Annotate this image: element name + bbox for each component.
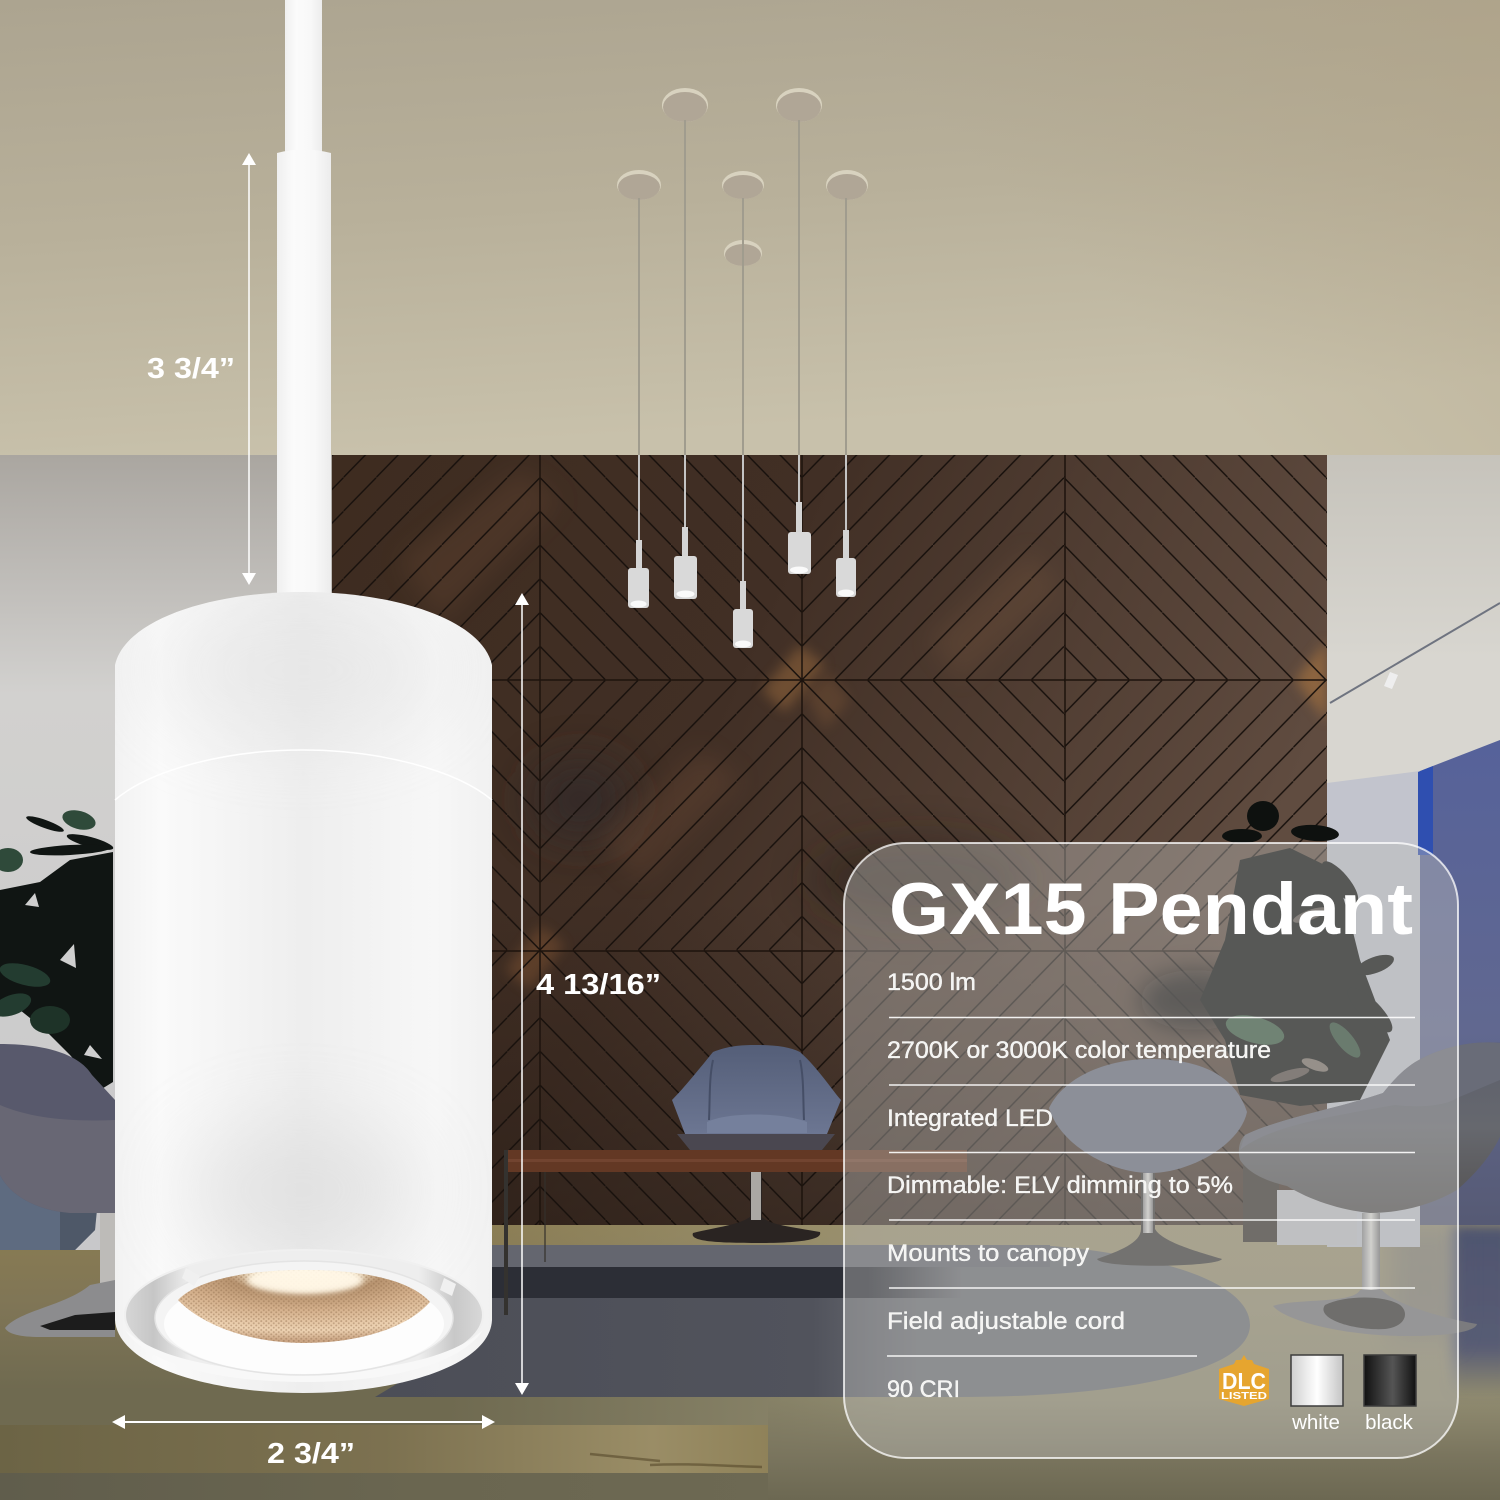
table bbox=[504, 1150, 967, 1315]
swatch: white finish bbox=[1291, 1355, 1343, 1406]
background mini pendants bbox=[617, 88, 868, 648]
stem bbox=[285, 0, 322, 155]
spec: cord: Field adjustable cord bbox=[887, 1308, 1125, 1335]
spec: lumens: 1500 lm bbox=[887, 969, 976, 996]
swatch label: black: black bbox=[1365, 1411, 1414, 1434]
left wall bbox=[0, 455, 340, 1250]
opening ring bbox=[125, 1250, 483, 1380]
rug bbox=[375, 1245, 1250, 1397]
foreground pendant fixture bbox=[115, 0, 492, 1393]
chevron line pattern bbox=[332, 455, 1327, 1225]
right wall and soffit bbox=[1327, 455, 1500, 1247]
dimension arrow: stem height bbox=[242, 153, 256, 585]
dimension label: 2 3/4: 2 3/4” bbox=[267, 1438, 355, 1470]
swatch: black finish bbox=[1364, 1355, 1416, 1406]
cylinder body bbox=[115, 592, 492, 1393]
spec: integrated LED: Integrated LED bbox=[887, 1105, 1053, 1132]
wood panel wall bbox=[332, 455, 1327, 1225]
panel: product specifications bbox=[844, 843, 1458, 1458]
dimension label: 4 13/16: 4 13/16” bbox=[536, 969, 661, 1001]
ceiling bbox=[0, 0, 1500, 456]
cords bbox=[639, 120, 846, 455]
icon: DLC listed badge bbox=[1219, 1355, 1269, 1406]
LED lens bbox=[178, 1266, 430, 1343]
heading: GX15 Pendant bbox=[889, 869, 1413, 950]
sleeves bbox=[639, 502, 846, 609]
pendant lenses bbox=[630, 566, 854, 648]
center lounge chair bbox=[672, 1045, 841, 1243]
stem collar bbox=[277, 150, 331, 600]
dimension arrow: body height bbox=[515, 593, 529, 1395]
pendant bodies bbox=[628, 532, 856, 648]
spec: color temperature: 2700K or 3000K color temperature bbox=[887, 1037, 1271, 1064]
canopies bbox=[617, 88, 868, 266]
dimension arrow: diameter bbox=[112, 1415, 495, 1429]
icon: DLC listed badge: DLC bbox=[1222, 1368, 1266, 1394]
spec: CRI: 90 CRI bbox=[887, 1376, 960, 1403]
dimension label: 3 3/4: 3 3/4” bbox=[147, 353, 235, 385]
right plant bbox=[1140, 801, 1398, 1106]
spec: dimming: Dimmable: ELV dimming to 5% bbox=[887, 1172, 1233, 1199]
floor bbox=[0, 1225, 1500, 1500]
right lounge chairs bbox=[1049, 1042, 1500, 1336]
left lounge chair bbox=[0, 1044, 115, 1337]
glass card bbox=[844, 843, 1458, 1458]
icon: DLC listed badge: LISTED bbox=[1221, 1391, 1267, 1402]
spec: mounting: Mounts to canopy bbox=[887, 1240, 1089, 1267]
left plant bbox=[0, 807, 114, 1090]
swatch label: white: white bbox=[1291, 1411, 1340, 1434]
